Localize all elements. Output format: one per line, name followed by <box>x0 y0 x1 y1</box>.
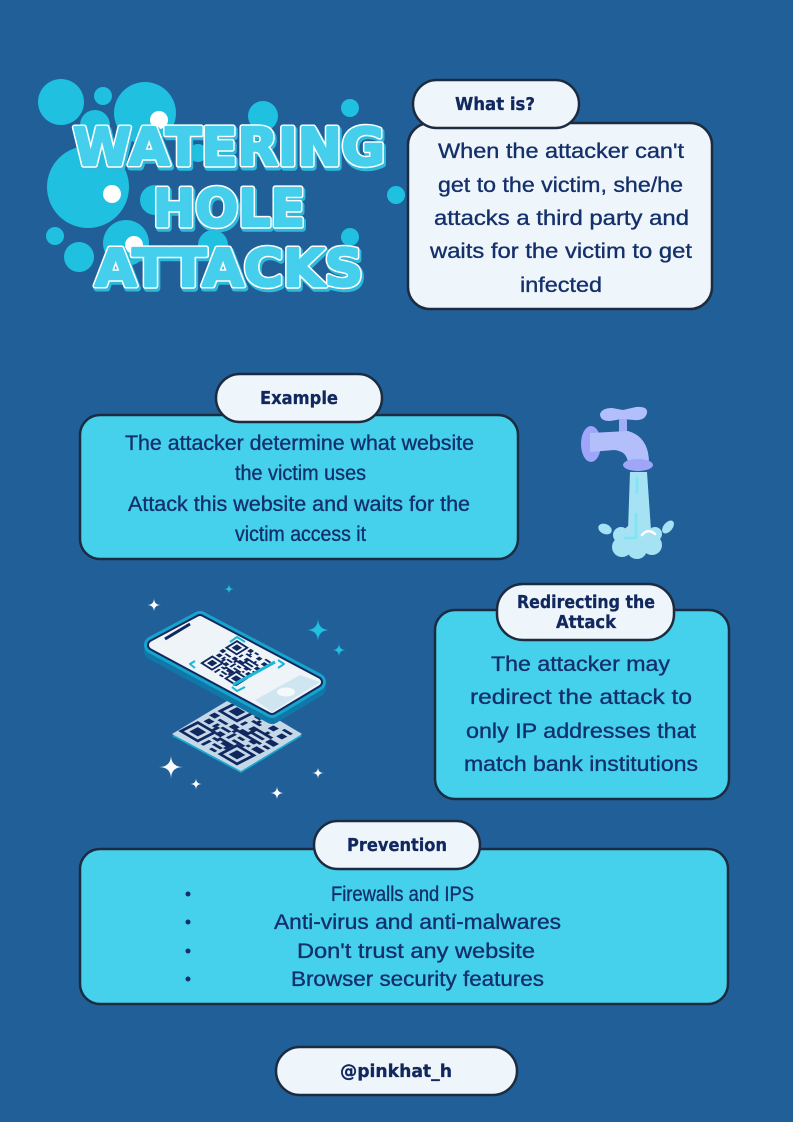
QR paper <box>172 695 302 773</box>
panel: redirecting the attack <box>435 584 729 799</box>
text: what is body: When the attacker can't <box>438 140 684 163</box>
text: redirecting body: match bank institutions <box>464 753 698 776</box>
heading: redirecting the attack <box>497 584 674 640</box>
title: HOLE <box>153 179 305 239</box>
text: redirecting body: The attacker may <box>491 653 671 676</box>
footer handle: @pinkhat_h <box>340 1061 452 1082</box>
text: prevention list: Firewalls and IPS <box>331 883 474 906</box>
title: ATTACKS <box>95 239 363 299</box>
text: example body <box>125 432 474 546</box>
text: what is body: attacks a third party and <box>434 207 689 230</box>
heading: example <box>216 374 382 422</box>
heading: redirecting the attack: Attack <box>556 612 617 633</box>
text: redirecting body: redirect the attack to <box>470 686 692 709</box>
text: example body: the victim uses <box>235 462 366 485</box>
heading: prevention: Prevention <box>347 835 447 856</box>
text: what is body: infected <box>520 274 602 297</box>
heading: example: Example <box>260 388 338 409</box>
text: example body: Attack this website and waits for the <box>128 493 470 516</box>
title: ATTACKS <box>96 242 364 302</box>
heading: what is <box>413 80 579 128</box>
text: prevention list: Browser security features <box>291 968 544 991</box>
icon: water faucet <box>581 407 676 559</box>
footer handle <box>276 1047 517 1095</box>
title: ATTACKS <box>95 239 363 299</box>
title: HOLE <box>154 182 306 242</box>
phone <box>153 620 320 715</box>
bubbles behind title <box>38 79 405 272</box>
heading: redirecting the attack: Redirecting the <box>517 592 655 613</box>
title: WATERING <box>74 120 386 180</box>
panel: prevention <box>80 821 728 1004</box>
sparkles <box>147 584 346 800</box>
title <box>73 118 386 302</box>
text: prevention list <box>274 883 561 991</box>
illustration: phone scanning QR code <box>147 584 346 800</box>
panel: what is <box>408 80 712 309</box>
heading: what is: What is? <box>455 94 535 115</box>
text: example body: The attacker determine what website <box>125 432 474 455</box>
title: WATERING <box>73 118 385 178</box>
text: what is body: waits for the victim to get <box>429 240 692 263</box>
bullets <box>186 892 190 982</box>
title: HOLE <box>153 179 305 239</box>
text: prevention list: Don't trust any website <box>297 940 535 963</box>
text: redirecting body: only IP addresses that <box>466 720 696 743</box>
text: redirecting body <box>464 653 698 776</box>
text: example body: victim access it <box>235 523 366 546</box>
title: WATERING <box>73 118 385 178</box>
text: prevention list: Anti-virus and anti-malwares <box>274 911 561 934</box>
panel: example <box>80 374 518 559</box>
text: what is body <box>429 140 692 297</box>
heading: prevention <box>314 821 480 869</box>
text: what is body: get to the victim, she/he <box>438 174 683 197</box>
